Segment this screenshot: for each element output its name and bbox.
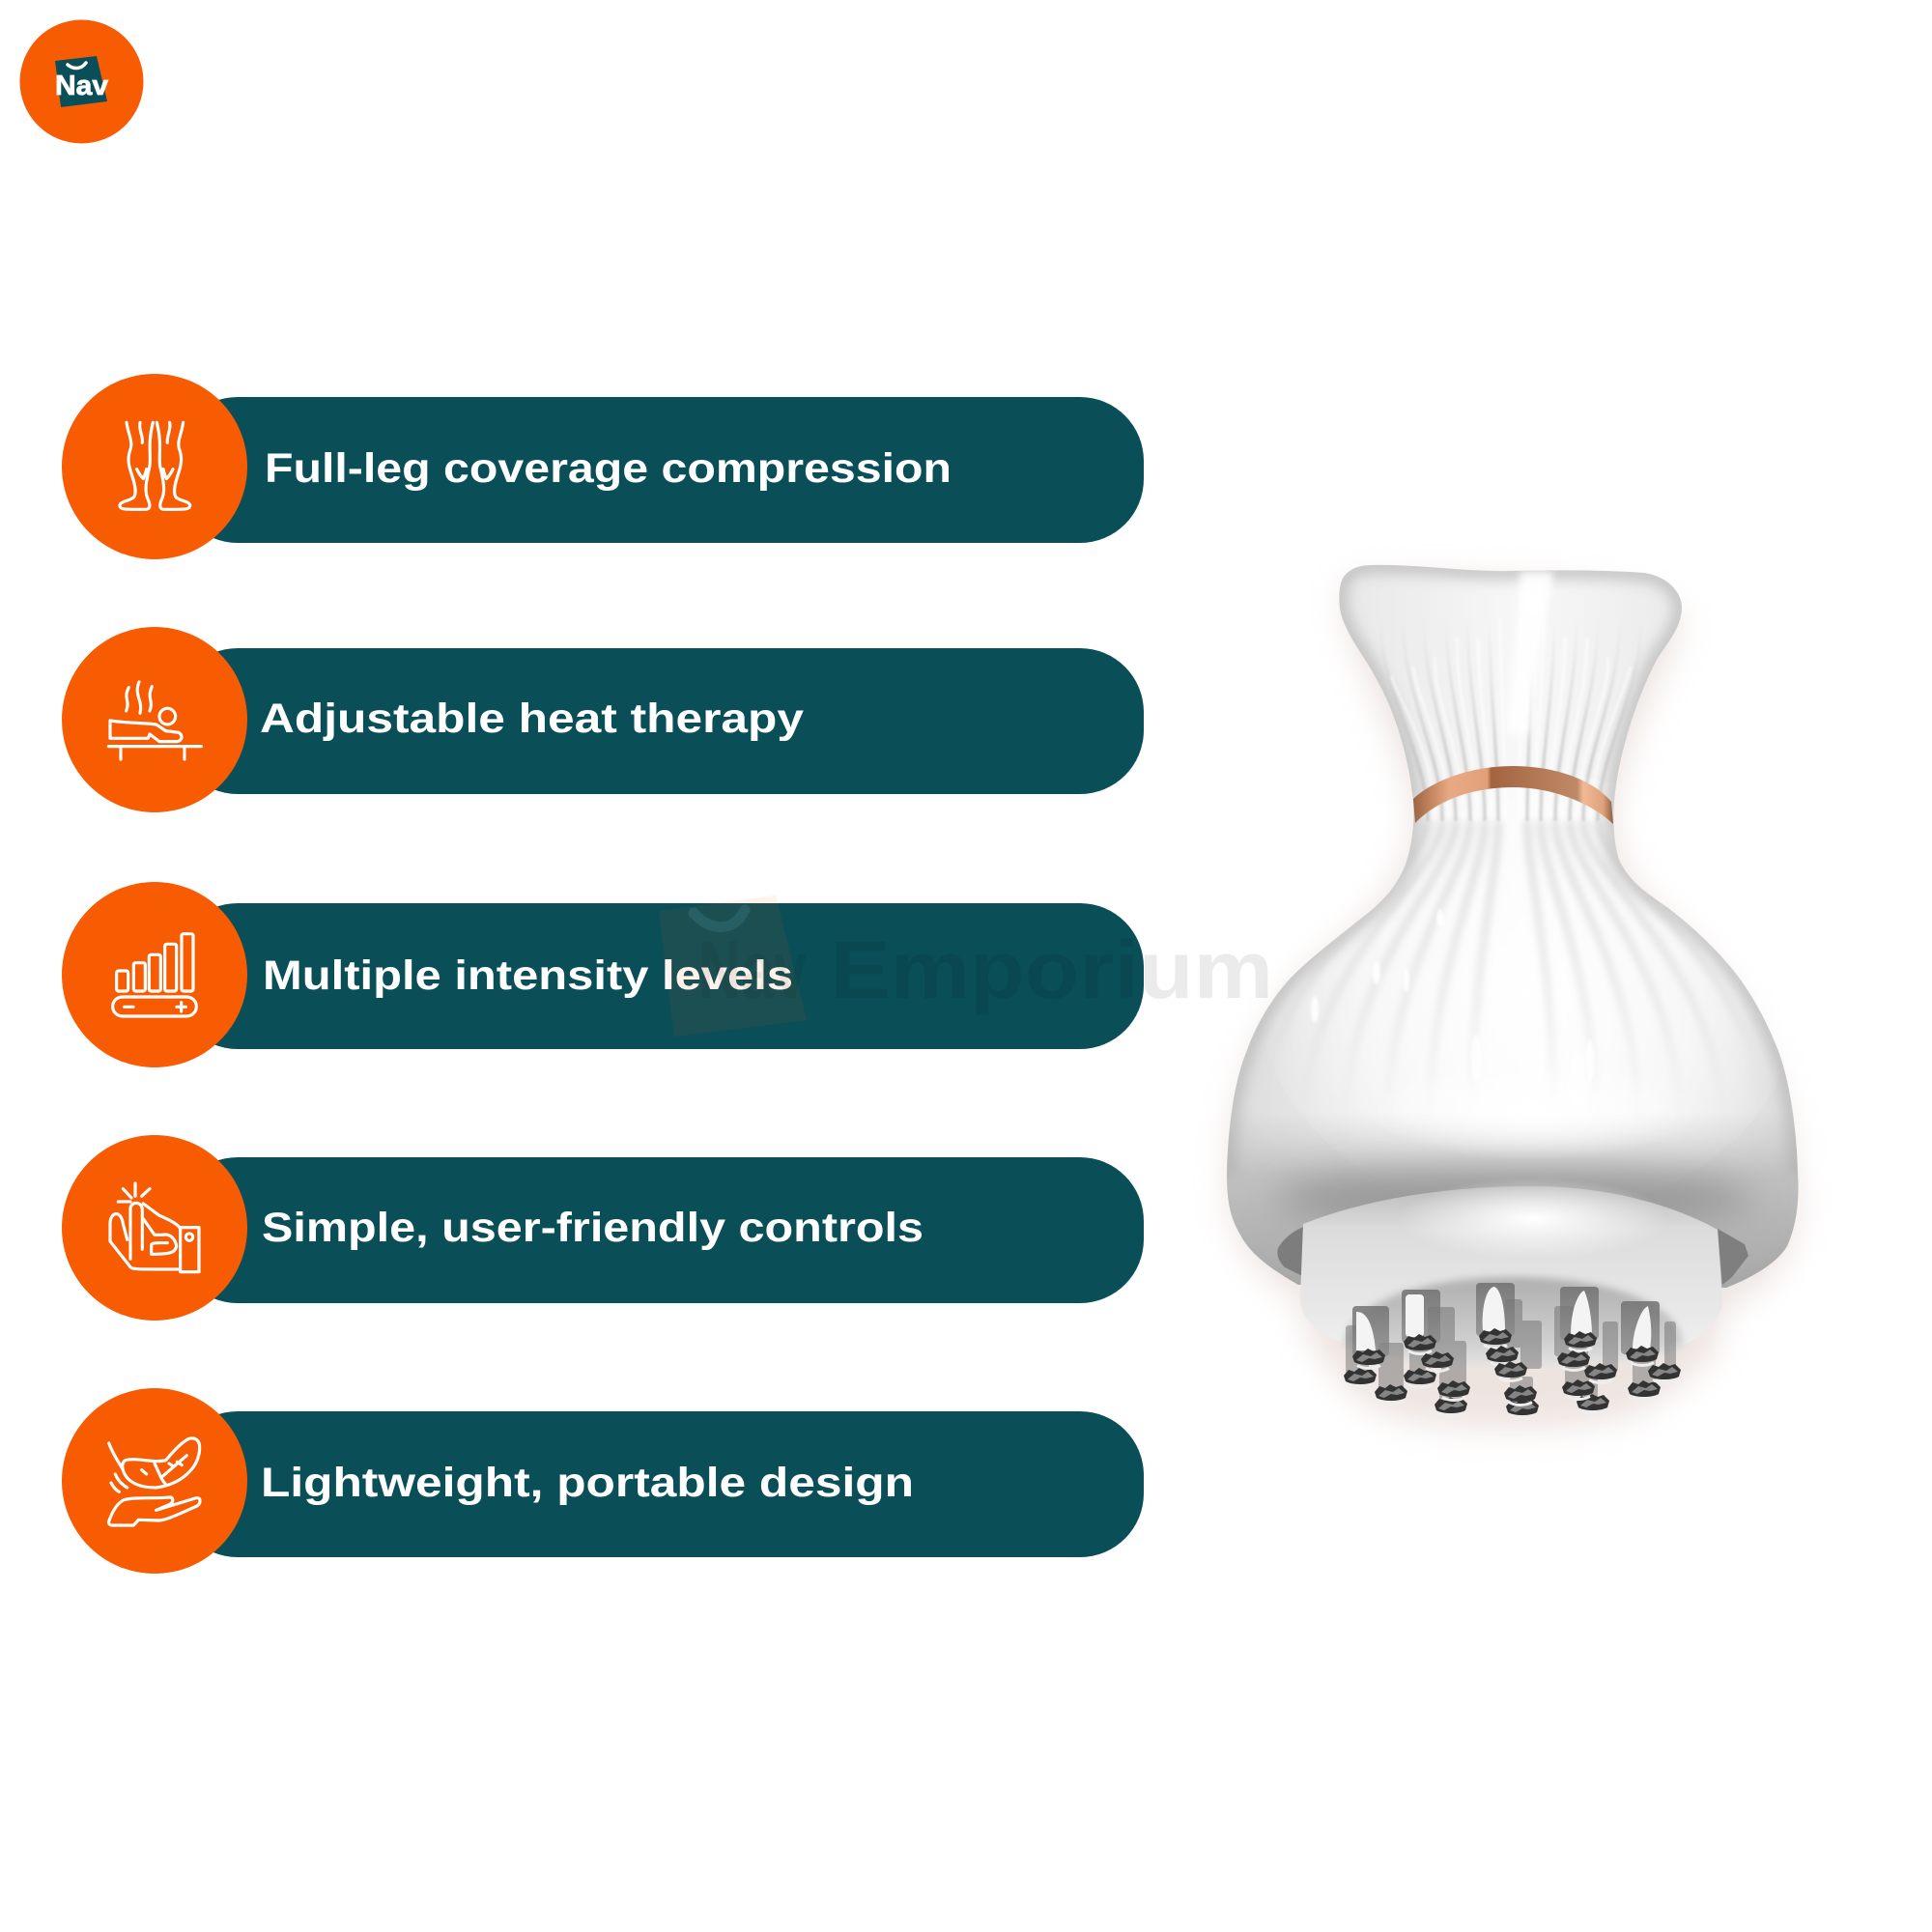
rear pin tubes — [1346, 1299, 1676, 1406]
massage head cup — [1300, 1186, 1722, 1359]
feature text 3: Multiple intensity levels — [263, 952, 793, 999]
panel: lightweight design row — [62, 1388, 1144, 1574]
neck ribs — [1399, 661, 1633, 821]
central neck shine — [1519, 570, 1555, 734]
icon: intensity bars — [113, 934, 196, 1016]
shadow above cup — [1273, 1165, 1756, 1231]
feature bar 2 — [174, 648, 1144, 794]
lower glow — [1464, 1122, 1602, 1150]
watermark — [659, 895, 1273, 1037]
feature text 4: Simple, user-friendly controls — [262, 1205, 923, 1251]
icon circle 3 — [62, 882, 247, 1067]
outer body shell — [1215, 560, 1814, 1294]
watermark logo — [659, 895, 807, 1037]
panel: user-friendly controls row — [62, 1135, 1144, 1321]
logo badge — [19, 19, 143, 143]
product: scalp massager — [1215, 560, 1814, 1430]
icon circle 2 — [62, 627, 247, 812]
lower body shading — [1227, 1125, 1799, 1288]
pin heads — [1344, 1328, 1681, 1418]
panel: heat therapy row — [62, 627, 1144, 812]
icon: heat massage — [108, 682, 201, 759]
icon circle 5 — [62, 1388, 247, 1574]
edge shading — [1227, 565, 1798, 1174]
panel: full-leg coverage row — [62, 374, 1144, 559]
neck shine lines — [1390, 669, 1631, 774]
icon circle 1 — [62, 374, 247, 559]
watermark word Emporium: Emporium — [831, 924, 1273, 1015]
gloss dabs — [1311, 910, 1592, 1053]
feature text 1: Full-leg coverage compression — [265, 445, 952, 492]
front pin tubes — [1352, 1283, 1660, 1356]
feature bar 3 — [174, 903, 1144, 1049]
feature bar 1 — [174, 397, 1144, 543]
product shadow — [1227, 578, 1798, 1430]
icon: legs — [120, 422, 190, 509]
feature text 5: Lightweight, portable design — [261, 1460, 914, 1506]
belly highlight — [1312, 862, 1750, 1126]
icon: feather over hand — [108, 1438, 200, 1525]
feature text 2: Adjustable heat therapy — [260, 696, 804, 742]
copper band — [1413, 766, 1613, 824]
massage pins — [1344, 1283, 1681, 1418]
logo badge: Nav — [55, 71, 108, 101]
feature bar 5 — [174, 1411, 1144, 1557]
right recess — [1718, 1229, 1748, 1285]
watermark word Nav: Nav — [698, 924, 807, 1015]
left recess — [1277, 1227, 1304, 1277]
cup inner recess — [1344, 1277, 1684, 1365]
icon: hand pressing control — [110, 1183, 199, 1272]
body ribs — [1329, 821, 1729, 1040]
panel: intensity levels row — [62, 882, 1144, 1067]
icon circle 4 — [62, 1135, 247, 1321]
feature bar 4 — [174, 1157, 1144, 1303]
